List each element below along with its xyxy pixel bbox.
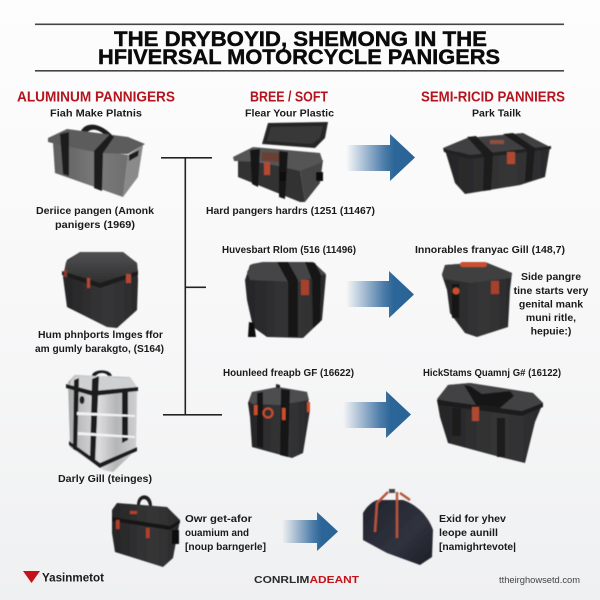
footer logo: Yasinmetot: Yasinmetot xyxy=(42,570,104,584)
footer logo: Conrlimadeant: CONRLIM ADEANT xyxy=(254,574,360,586)
caption: exid xyxy=(439,513,516,553)
captions, right column: Side pangre xyxy=(521,271,581,283)
icon: upright dark pannier xyxy=(248,384,310,458)
caption: get-afor xyxy=(185,513,266,553)
captions, middle column: Hard pangers hardrs (1251 (11467) xyxy=(206,205,375,217)
title: THE DRYBOYID, SHEMONG IN THE xyxy=(114,28,487,51)
heading: bree soft: Flear Your Plastic xyxy=(245,108,334,120)
caption: exid: leope aunill xyxy=(439,527,498,539)
icon: large dark pannier xyxy=(437,383,543,463)
captions, right column: Innorables franyac Gill (148,7) xyxy=(415,244,565,256)
captions, right column: muni ritle, xyxy=(526,312,576,324)
captions, left column: am gumly barakgto, (S164) xyxy=(35,343,164,355)
icon: square dark pannier xyxy=(442,262,512,337)
title block xyxy=(35,24,564,72)
captions, right column: tine starts very xyxy=(514,285,589,297)
icon: black hard pannier xyxy=(62,252,138,328)
caption: get-afor: ouamium and xyxy=(185,527,249,539)
arrow 4 xyxy=(282,512,338,551)
captions, left column xyxy=(35,205,164,485)
captions, right column: genital mank xyxy=(519,298,583,310)
captions, middle column: Hounleed freapb GF (16622) xyxy=(223,367,354,379)
icon: open hard pannier xyxy=(233,122,328,202)
arrow 1 xyxy=(346,134,415,181)
icon: black case with handle xyxy=(112,495,180,567)
heading: semi-rigid panniers: Park Tailk xyxy=(472,108,521,120)
captions, left column: Deriice pangen (Amonk xyxy=(36,205,154,217)
caption: exid: Exid for yhev xyxy=(439,513,506,525)
arrow 3 xyxy=(343,391,411,438)
heading: semi-rigid panniers xyxy=(421,90,565,120)
arrow 2 xyxy=(346,271,414,318)
captions, middle column: Huvesbart Rlom (516 (11496) xyxy=(222,244,356,256)
captions, left column: Hum phnþorts lmges ffor xyxy=(38,329,163,341)
icon: soft bag xyxy=(363,489,433,565)
captions, right column: hepuie:) xyxy=(531,326,571,338)
icon: silver aluminum pannier xyxy=(66,370,138,472)
captions, right column: HickStams Quamnj G# (16122) xyxy=(423,367,561,379)
heading: aluminum panniers: Fiah Make Platnis xyxy=(50,108,142,120)
heading: aluminum panniers: ALUMINUM PANNIGERS xyxy=(17,90,175,106)
captions, left column: panigers (1969) xyxy=(55,219,135,231)
caption: get-afor: Owr get-afor xyxy=(185,513,252,525)
caption: exid: [namighrtevote| xyxy=(439,541,516,553)
icon: black box with straps xyxy=(245,262,326,338)
captions, right column xyxy=(415,244,589,379)
heading: aluminum panniers xyxy=(17,90,175,120)
connector lines xyxy=(161,157,222,416)
captions, middle column xyxy=(206,205,375,379)
title: HFIVERSAL MOTORCYCLE PANIGERS xyxy=(98,46,500,69)
heading: bree soft xyxy=(245,90,334,120)
footer url: ttheirghowsetd.com xyxy=(499,575,580,585)
caption: get-afor: [noup barngerle] xyxy=(185,541,266,553)
title xyxy=(98,28,500,69)
heading: bree soft: BREE / SOFT xyxy=(250,90,328,106)
captions, left column: Darly Gill (teinges) xyxy=(58,473,152,485)
icon: semi-rigid wide pannier xyxy=(443,133,551,194)
heading: semi-rigid panniers: SEMI-RICID PANNIERS xyxy=(421,90,565,106)
icon: grey aluminum pannier xyxy=(48,125,145,197)
